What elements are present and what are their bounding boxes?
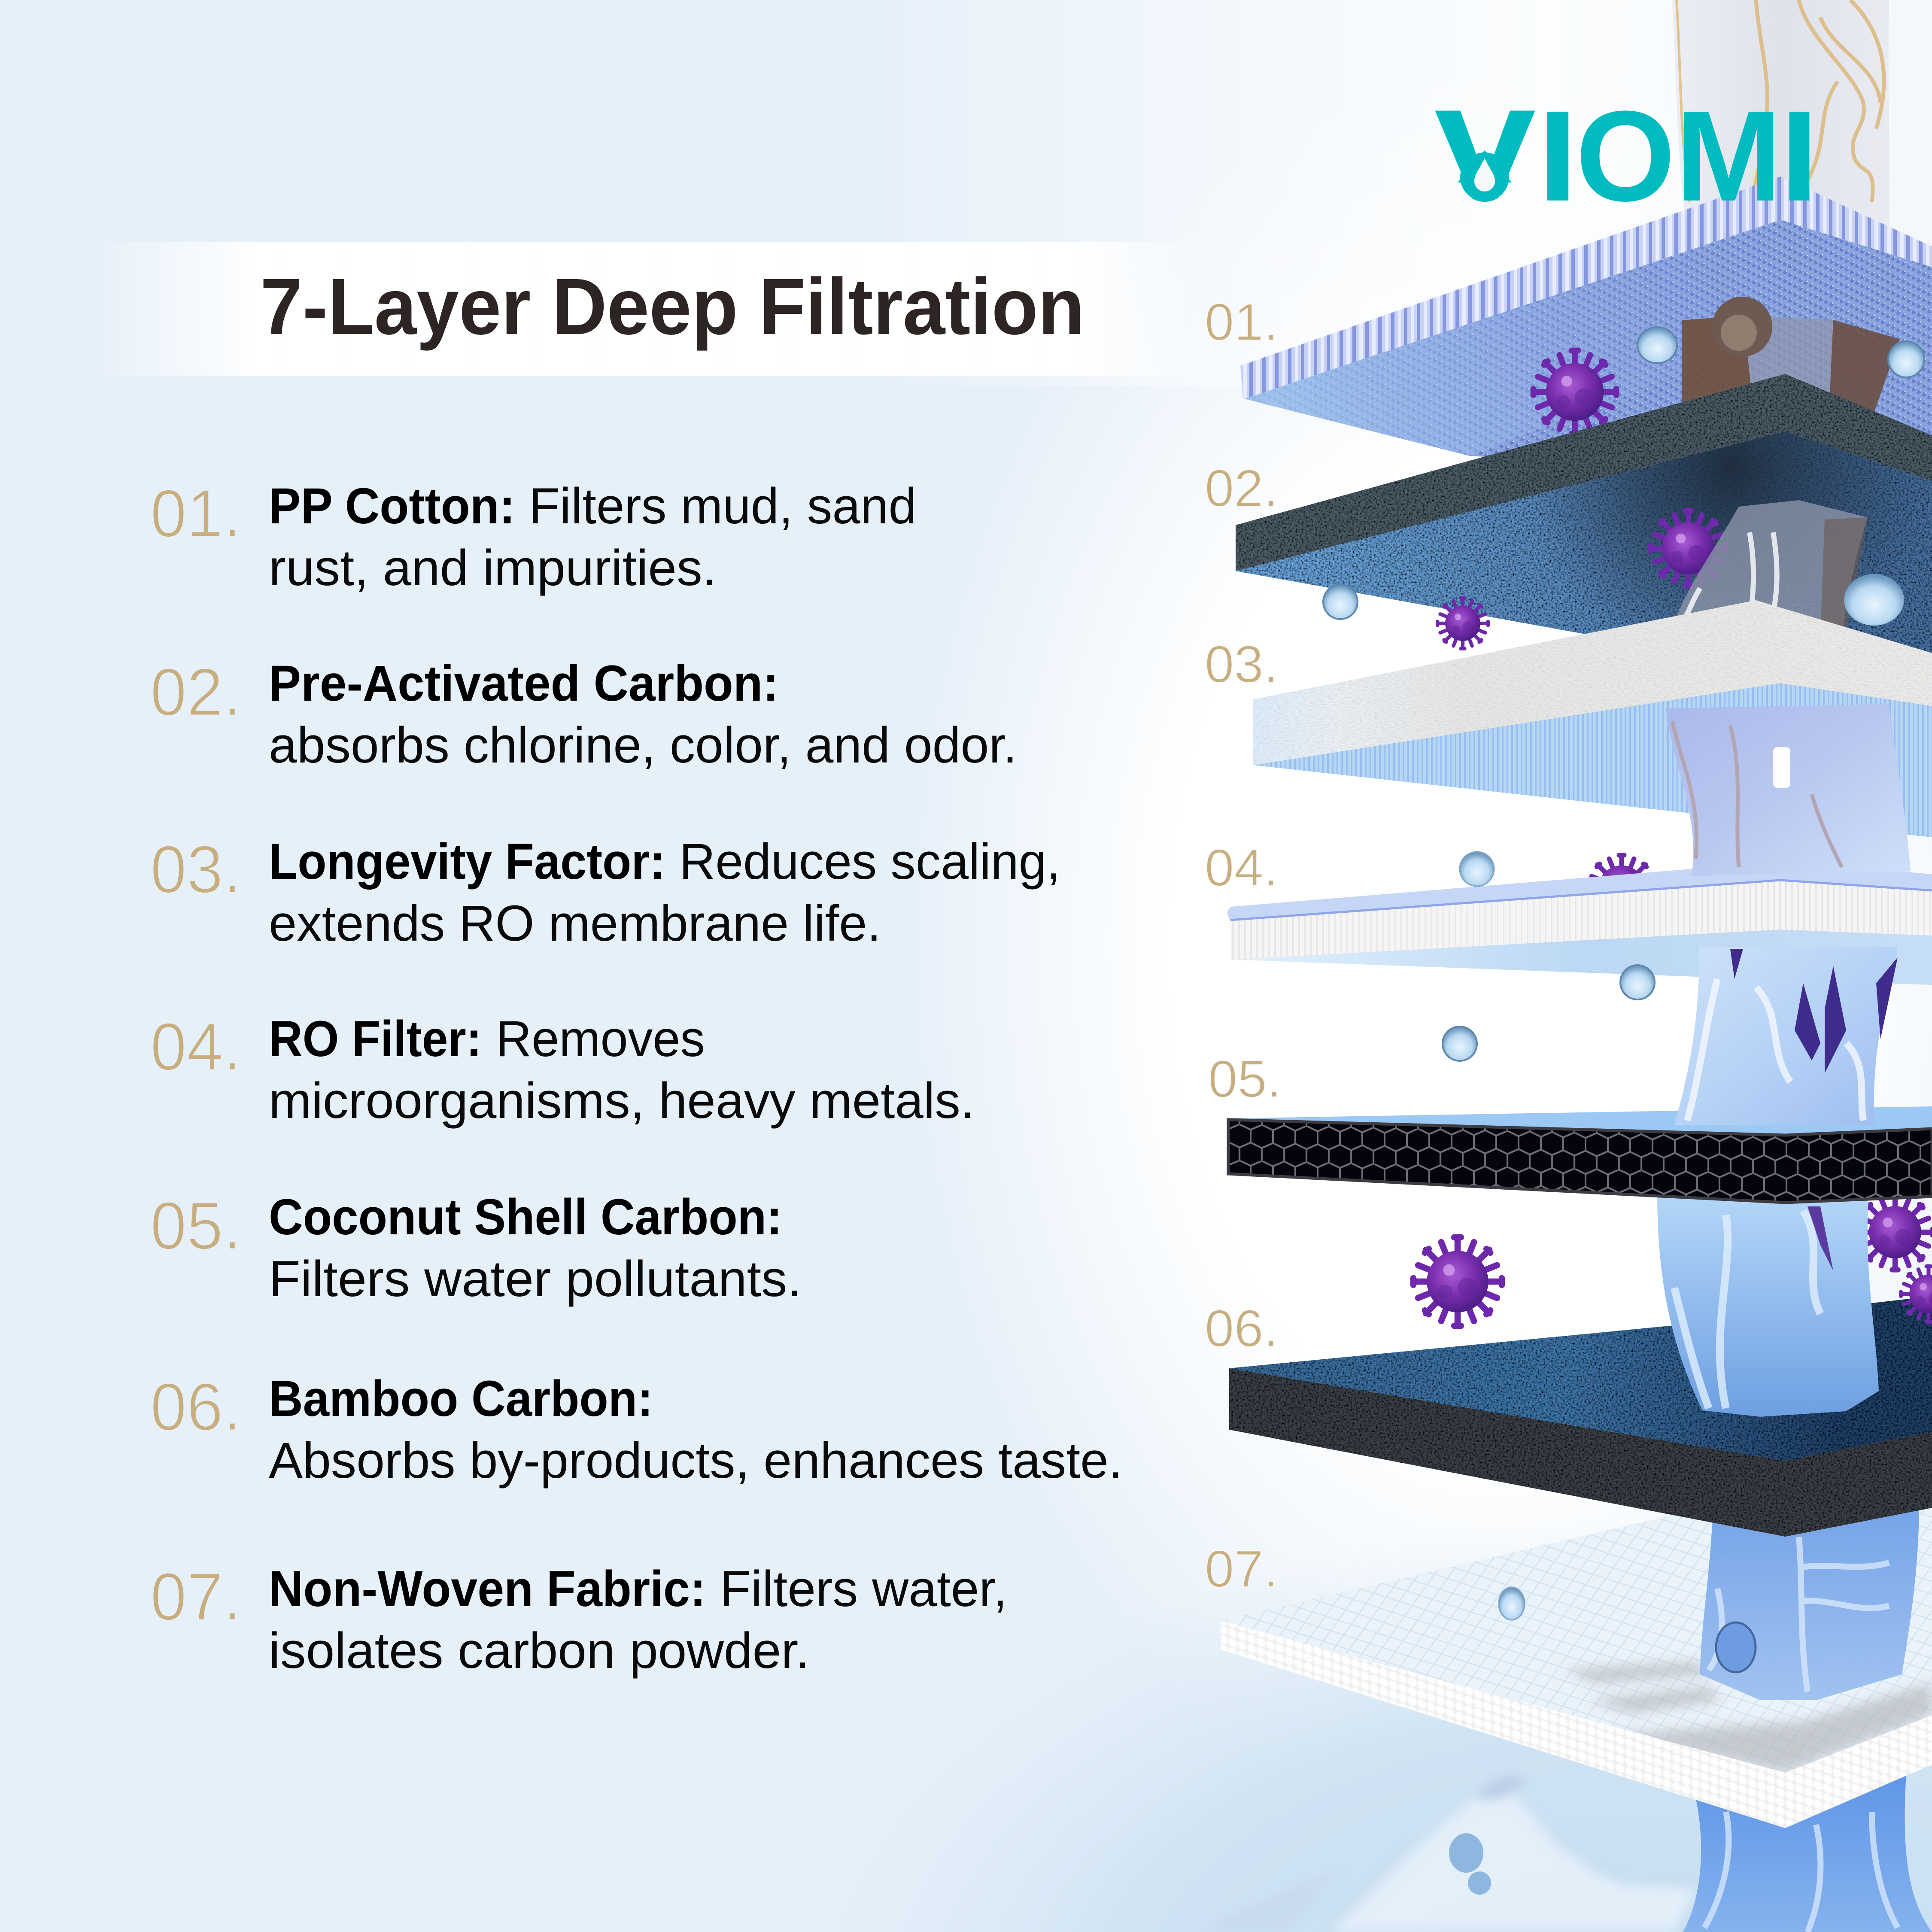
item 07: Non-Woven Fabric: 07. xyxy=(150,1559,241,1634)
item 07: Non-Woven Fabric: Filters water, xyxy=(720,1561,1007,1617)
layer 6 top surface xyxy=(1229,1296,1932,1461)
layer 3 underside xyxy=(1253,683,1932,837)
filter layer 5: coconut shell carbon xyxy=(1228,1106,1932,1203)
virus behind layer 2 xyxy=(1533,350,1616,434)
item 01: PP Cotton xyxy=(150,476,917,596)
item 04: RO Filter: 04. xyxy=(150,1009,241,1084)
item 04: RO Filter xyxy=(150,1009,975,1129)
layer number labels beside the stack: 02. xyxy=(1205,459,1278,517)
water column: layer 3 to layer 4 xyxy=(1666,704,1911,876)
item 01: PP Cotton: rust, and impurities. xyxy=(269,540,717,596)
water column: below layer 7 xyxy=(1683,1773,1932,1932)
water column: brown reflection under layer 1 xyxy=(1682,316,1900,447)
item 03: Longevity Factor xyxy=(150,832,1060,952)
layer 1 underside mesh xyxy=(1243,220,1932,481)
layer number labels beside the stack xyxy=(1205,293,1282,1598)
layer 4 white edge xyxy=(1230,880,1932,960)
virus under layer 2 xyxy=(1651,511,1725,586)
item 02: Pre-Activated Carbon xyxy=(150,655,1017,774)
item 03: Longevity Factor: 03. xyxy=(150,832,241,907)
item 01: PP Cotton: PP Cotton: xyxy=(269,478,515,535)
item 05: Coconut Shell Carbon: Coconut Shell Carbon: xyxy=(269,1189,782,1245)
layer 2 underside xyxy=(1236,431,1932,704)
droplets on layer 7 xyxy=(1499,1587,1756,1672)
filter layer 4: RO filter xyxy=(1227,862,1932,985)
item 03: Longevity Factor: Reduces scaling, xyxy=(679,833,1060,890)
title: 7-Layer Deep Filtration xyxy=(260,262,1084,351)
logo: VIOMI: M xyxy=(1675,84,1782,228)
item 04: RO Filter: microorganisms, heavy metals. xyxy=(269,1072,975,1129)
layer 4 underside xyxy=(1230,930,1932,985)
layer 1 ridged edge xyxy=(1240,176,1932,399)
layer 5 top sliver xyxy=(1228,1106,1932,1135)
filter layer 7: non-woven fabric xyxy=(1221,1494,1932,1828)
droplets and virus below layer 2 xyxy=(1323,574,1904,649)
virus peeking above layer 4 xyxy=(1588,855,1655,922)
item 01: PP Cotton: Filters mud, sand xyxy=(529,478,917,535)
layer 7 shadow xyxy=(1563,1662,1932,1773)
water column: top segment with gold swirls xyxy=(1672,0,1889,240)
viruses behind water column xyxy=(1858,1195,1932,1321)
item 05: Coconut Shell Carbon: Filters water pollutants. xyxy=(269,1251,802,1307)
filter layer 1: PP cotton xyxy=(1240,176,1932,481)
item 05: Coconut Shell Carbon xyxy=(150,1188,802,1307)
layer 3 edge xyxy=(1253,600,1932,765)
item 01: PP Cotton: 01. xyxy=(150,476,241,551)
layer 6 side xyxy=(1229,1368,1932,1537)
layer number labels beside the stack: 03. xyxy=(1205,635,1278,693)
water column: layer 4 to layer 5 xyxy=(1674,947,1898,1125)
item 06: Bamboo Carbon: 06. xyxy=(150,1370,241,1445)
water column: layer 5 to layer 6 xyxy=(1657,1194,1879,1417)
logo: VIOMI: O xyxy=(1576,84,1675,228)
item 03: Longevity Factor: Longevity Factor: xyxy=(269,833,665,890)
layer number labels beside the stack: 06. xyxy=(1205,1299,1278,1358)
logo: VIOMI: I xyxy=(1780,84,1819,228)
layer 4 blue top xyxy=(1227,862,1932,920)
item 05: Coconut Shell Carbon: 05. xyxy=(150,1188,241,1264)
item 06: Bamboo Carbon xyxy=(150,1370,1123,1489)
layer 5 honeycomb edge xyxy=(1228,1120,1932,1203)
logo: VIOMI: I xyxy=(1537,84,1578,228)
layer number labels beside the stack: 01. xyxy=(1205,293,1278,351)
logo: VIOMI xyxy=(1436,84,1819,228)
water column: layer 2 to layer 3 xyxy=(1670,500,1868,640)
layer 7 side xyxy=(1221,1621,1932,1828)
virus beside water column xyxy=(1413,1237,1502,1326)
layer 2 edge xyxy=(1236,374,1932,571)
filter layer 6: bamboo carbon xyxy=(1229,1296,1932,1537)
filter layer 2: pre-activated carbon xyxy=(1236,374,1932,704)
water column: layer 6 to layer 7 xyxy=(1700,1503,1919,1700)
item 02: Pre-Activated Carbon: 02. xyxy=(150,655,241,730)
layer number labels beside the stack: 05. xyxy=(1208,1050,1282,1108)
droplets on layer 1 xyxy=(1637,297,1924,377)
white title band xyxy=(86,242,1228,376)
layer number labels beside the stack: 07. xyxy=(1205,1540,1278,1598)
item 07: Non-Woven Fabric xyxy=(150,1559,1007,1679)
item 07: Non-Woven Fabric: isolates carbon powder. xyxy=(269,1622,810,1679)
layer 7 top surface xyxy=(1221,1494,1932,1773)
item 06: Bamboo Carbon: Bamboo Carbon: xyxy=(269,1370,653,1427)
item 04: RO Filter: RO Filter: xyxy=(269,1011,482,1067)
item 02: Pre-Activated Carbon: absorbs chlorine, color, and odor. xyxy=(269,717,1017,774)
logo: VIOMI: V xyxy=(1436,84,1535,228)
layer number labels beside the stack: 04. xyxy=(1205,838,1278,897)
item 03: Longevity Factor: extends RO membrane life. xyxy=(269,895,881,952)
water surface and splash xyxy=(773,1503,1932,1932)
item 07: Non-Woven Fabric: Non-Woven Fabric: xyxy=(269,1561,706,1617)
water droplets in mid air xyxy=(1443,852,1655,1895)
item 04: RO Filter: Removes xyxy=(496,1011,705,1067)
item 02: Pre-Activated Carbon: Pre-Activated Carbon: xyxy=(269,655,779,712)
filter layer 3: longevity factor xyxy=(1253,600,1932,837)
item 06: Bamboo Carbon: Absorbs by-products, enhances taste. xyxy=(269,1432,1123,1489)
